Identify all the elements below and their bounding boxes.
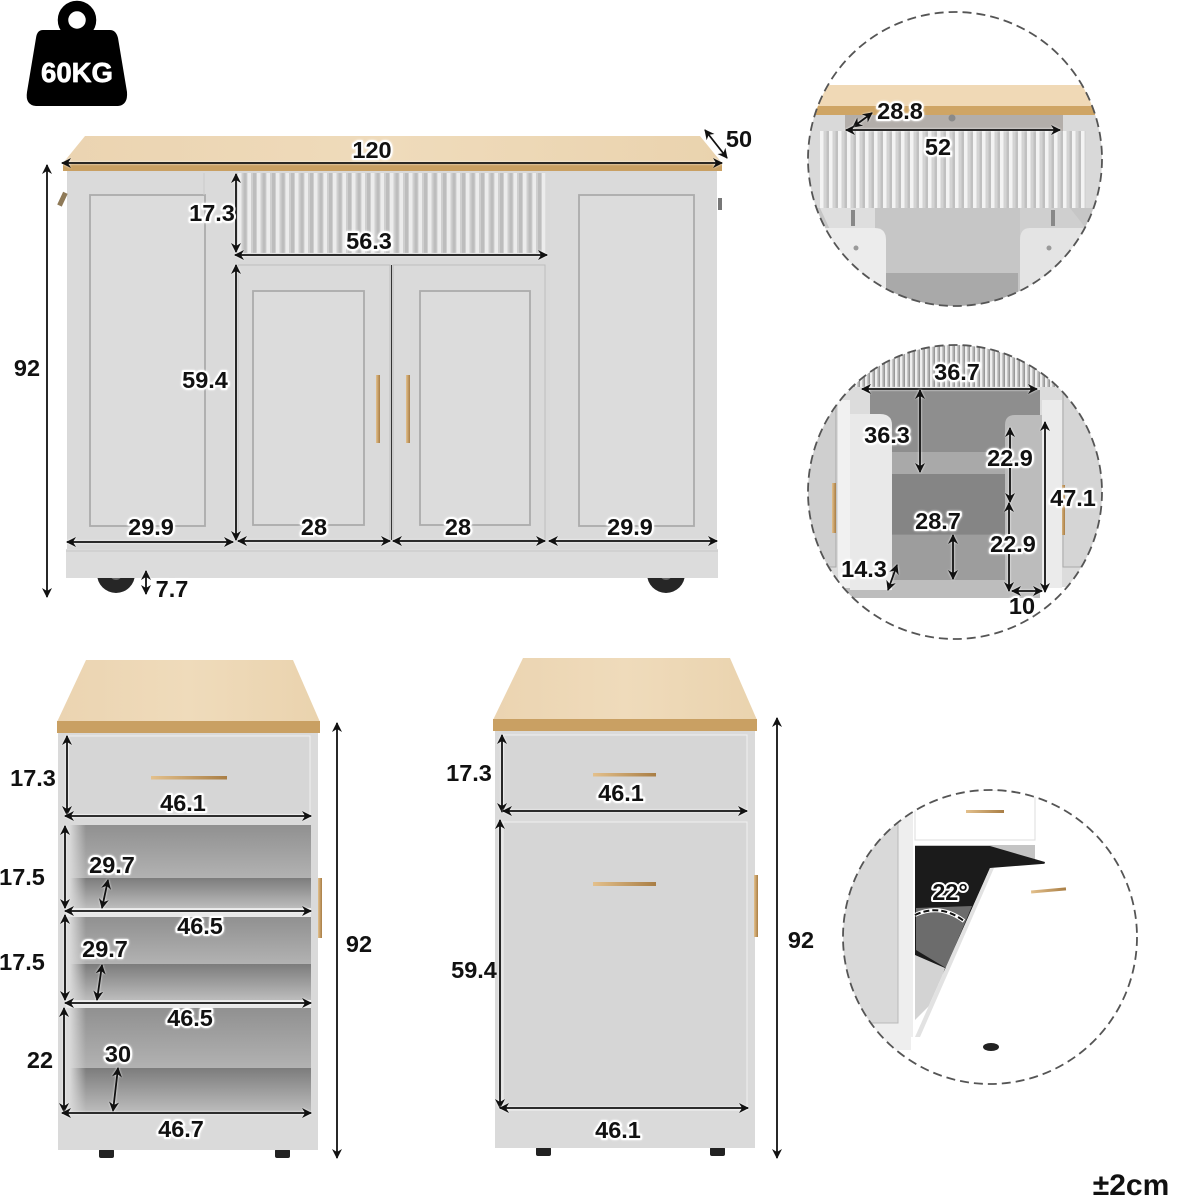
dimension: 14.3 [841,556,897,590]
wheels and foot [97,555,685,593]
circle detail: drawer [800,12,1110,308]
dimension: 29.7 second: 29.7 [82,936,128,962]
fluted top [854,345,1056,387]
drawer interior [800,114,1110,131]
dimension: 22.9 upper: 22.9 [987,445,1033,471]
dimension: 46.1: 46.1 [595,1117,641,1143]
door handles [376,375,410,443]
dimension: 10: 10 [1009,593,1035,619]
drawer front [915,790,1035,840]
dimension: drawer height 17.3: 17.3 [189,200,235,226]
dimension: 22 [27,1008,64,1112]
dimension: 22.9 lower [990,503,1036,591]
icon: 60KG weight capacity: 60KG [41,57,113,88]
dimension: 28.7: 28.7 [915,508,961,534]
middle cabinet: side view with tilt door [493,658,758,1156]
shelf opening 2 [70,917,311,1000]
shelf opening 3 [70,1008,311,1112]
dimension: 46.5 second: 46.5 [167,1005,213,1031]
base [911,1037,999,1051]
angle: 22 degrees: 22° [932,879,968,905]
dimension: door height 59.4: 59.4 [182,367,228,393]
circle detail: cabinet interior [800,345,1113,639]
lower interior [818,208,1094,306]
dashed circle outline [843,790,1137,1084]
main cabinet: front view [57,136,722,593]
dimension: 29.7 second [82,936,128,1000]
dimension: 46.7: 46.7 [158,1116,204,1142]
fluted drawer front [820,131,1086,208]
dimension: 17.5 second: 17.5 [0,949,45,975]
dimension: 17.3 [446,735,502,812]
body [495,731,755,1148]
dimension: 22.9 lower: 22.9 [990,531,1036,557]
interior shelves [845,390,1040,598]
dimension: 14.3: 14.3 [841,556,887,582]
dimension: 46.1: 46.1 [160,790,206,816]
dimension: 46.5: 46.5 [177,913,223,939]
dimension: 92: 92 [788,927,814,953]
dimension: left door width 29.9: 29.9 [128,514,174,540]
dimension: door width 28 right: 28 [445,514,471,540]
dimension: 17.3: 17.3 [10,765,56,791]
dimension: width 120: 120 [352,137,392,163]
right door [550,173,717,541]
dimension: 17.3: 17.3 [446,760,492,786]
dimension: 36.7: 36.7 [934,359,980,385]
dimension: door width 28 left: 28 [301,514,327,540]
left door [68,173,233,541]
bin interior [915,845,1045,1020]
dimension: 46.1: 46.1 [598,780,644,806]
wood top detail [800,85,1110,115]
worktop [57,660,320,733]
dimension: 17.5 [0,826,65,908]
centre left door [238,265,390,540]
side handle [754,875,758,937]
shelf opening 1 [70,825,311,908]
dimension: right door width 29.9: 29.9 [607,514,653,540]
dimension: 29.7 [89,852,135,908]
dimension: drawer inner width 52: 52 [925,134,951,160]
dimension: drawer width 56.3: 56.3 [346,228,392,254]
open door panel [915,864,1066,1037]
dashed circle outline [808,12,1102,306]
drawer [503,735,747,811]
dimension: 30: 30 [105,1041,131,1067]
angle: 22 degrees [915,879,968,921]
dimension: wheel height 7.7: 7.7 [156,576,188,602]
feet [99,1149,290,1158]
shelf dividers [66,908,311,1008]
dimension: 22: 22 [27,1047,53,1073]
left cabinet: side view with shelves [57,660,322,1158]
dimension: drawer depth 28.8 [853,98,923,127]
fluted drawer [237,173,546,253]
side handle [318,878,322,938]
dimension: 22.9 upper [987,428,1033,502]
dimension: 28.7 [915,508,961,579]
side hooks [57,192,722,210]
centre right door [393,265,545,540]
side panels [800,131,1110,211]
dimension: 59.4: 59.4 [451,957,497,983]
dimension: height 92: 92 [14,355,40,381]
dimension: 29.7: 29.7 [89,852,135,878]
dimension: drawer depth 28.8: 28.8 [877,98,923,124]
open doors [838,400,1062,590]
dimension: 47.1: 47.1 [1050,485,1096,511]
dimension: wheel height 7.7 [146,571,188,602]
side panel [843,813,913,1050]
dimension: 17.5 second [0,915,65,1000]
dimension: drawer height 17.3 [189,174,236,252]
dimension: 92: 92 [346,931,372,957]
dimension: 36.3 [864,390,920,472]
cabinet body [67,171,717,578]
dashed circle outline [808,345,1102,639]
dimension: depth 50 [705,126,752,158]
body [58,733,318,1150]
worktop [63,136,722,171]
side doors [800,387,1113,587]
drawer [68,736,310,815]
dimension: depth 50: 50 [726,126,752,152]
dimension: 17.3 [10,736,67,815]
worktop [493,658,757,731]
circle detail: tilt-out bin door [840,780,1137,1084]
dimension: 30 [105,1041,131,1111]
dimension: 36.3: 36.3 [864,422,910,448]
door [503,822,747,1110]
dimension: 17.5: 17.5 [0,864,45,890]
feet [536,1147,725,1156]
icon: 60KG weight capacity [27,6,127,106]
